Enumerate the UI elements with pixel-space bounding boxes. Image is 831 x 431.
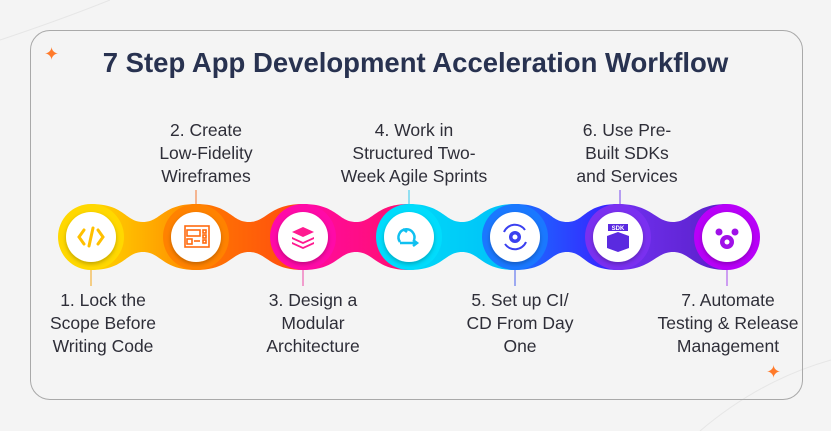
step 1 label: 1. Lock the	[60, 290, 146, 310]
step 7 label: Testing & Release	[657, 313, 799, 333]
step 2 label: Low-Fidelity	[159, 143, 253, 163]
connector lines	[91, 190, 727, 286]
icon: agile loop	[398, 229, 417, 246]
step 6 label: and Services	[576, 166, 678, 186]
icon: sparkle top-left: ✦	[44, 44, 59, 64]
icon: layers	[292, 227, 314, 249]
step 1 label: Writing Code	[53, 336, 153, 356]
icon: sparkle bottom-right: ✦	[766, 362, 781, 382]
step 2 label	[159, 120, 253, 186]
title: 7 Step App Development Acceleration Workflow	[103, 47, 728, 78]
step 4 label: 4. Work in	[375, 120, 453, 140]
step 6 label: Built SDKs	[585, 143, 669, 163]
icon: test gear	[716, 228, 738, 249]
step 6 label	[576, 120, 678, 186]
step 5 label: CD From Day	[467, 313, 573, 333]
step 2 label: 2. Create	[170, 120, 242, 140]
step circles	[58, 204, 760, 270]
step 7 label: 7. Automate	[681, 290, 775, 310]
icon: SDK box: SDK	[612, 226, 625, 232]
step 4 label: Structured Two-	[352, 143, 476, 163]
step 6 label: 6. Use Pre-	[583, 120, 671, 140]
step 5 label: 5. Set up CI/	[471, 290, 569, 310]
step 5 label	[467, 290, 574, 356]
icon: code	[79, 228, 103, 246]
step 5 label: One	[503, 336, 537, 356]
card	[30, 30, 803, 400]
step 2 label: Wireframes	[161, 166, 251, 186]
step 4 label	[340, 120, 487, 186]
step 1 label	[50, 290, 156, 356]
step 3 label: Modular	[281, 313, 345, 333]
step 4 label: Week Agile Sprints	[341, 166, 487, 186]
icon: SDK box	[607, 224, 629, 252]
step 1 label: Scope Before	[50, 313, 156, 333]
icon: CI/CD gear	[504, 225, 526, 249]
step 3 label: Architecture	[266, 336, 360, 356]
step 3 label: 3. Design a	[269, 290, 357, 310]
step 7 label: Management	[677, 336, 779, 356]
icon: wireframe	[185, 226, 209, 247]
step 3 label	[266, 290, 360, 356]
step 7 label	[657, 290, 799, 356]
